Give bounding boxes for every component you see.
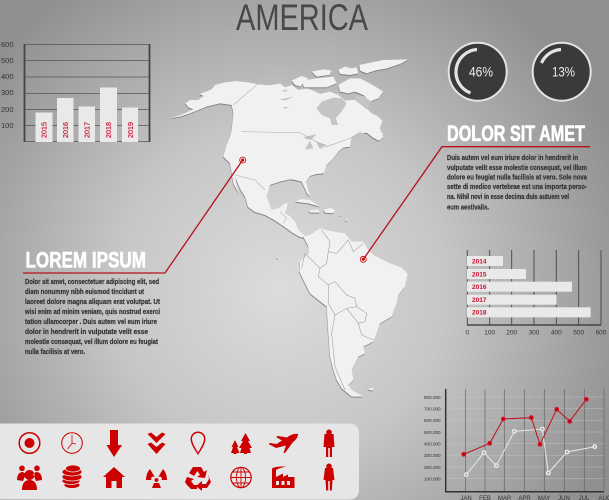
chart axis labels: 500 (1, 56, 14, 65)
chart axis labels (1, 40, 14, 130)
axis labels: 400 (551, 330, 562, 336)
bar labels: 2017 (472, 297, 487, 304)
map: arctic islands (292, 59, 408, 221)
bars (467, 256, 591, 317)
horizontal bar chart (465, 250, 607, 336)
y labels (424, 395, 441, 482)
text block: dolor: na. Nihil novi in esse decima duis autuem vel (447, 194, 569, 201)
axis labels: 600 (596, 330, 607, 336)
text block: dolor: eum aestivalis. (447, 204, 489, 212)
icon: trees (231, 433, 252, 454)
chart axis labels: 400 (1, 72, 14, 81)
bar chart: years (1, 40, 150, 142)
bar labels: 2016 (63, 122, 70, 138)
icon: clock (62, 433, 82, 453)
text block: lorem: Dolor sit amet, consectetuer adipiscing elit, sed (25, 279, 159, 286)
y labels: 200.000 (424, 465, 441, 470)
text block: dolor: sette di medico vertebrae est una importa perso- (447, 184, 588, 191)
text block: lorem: laoreet dolore magna aliquam erat volutpat. Ut (25, 299, 161, 306)
map: the Americas (170, 59, 408, 397)
text block: lorem: diam nonummy nibh euismod tincidunt ut (25, 289, 145, 296)
gauge: 13% (533, 43, 591, 101)
marker: USA (240, 157, 246, 163)
bar labels (472, 258, 487, 317)
panel: icons (0, 424, 359, 500)
chart axis labels: 100 (1, 121, 14, 130)
line chart (424, 389, 609, 500)
bar labels: 2017 (84, 122, 92, 138)
text block: dolor: Duis autem vel eum iriure dolor in hendrerit in (447, 155, 578, 162)
map: Hudson Bay and lakes (280, 89, 372, 149)
y labels: 800.000 (424, 395, 441, 400)
bar labels: 2015 (42, 122, 48, 138)
gauge: 13%: 13% (552, 64, 575, 80)
icon: woman (324, 464, 334, 490)
icon: map pin (190, 432, 206, 455)
axis labels: 100 (484, 330, 496, 336)
text block: dolor: vulputate velit esse molestie consequat, vel illum (447, 165, 587, 172)
icon: recycle (185, 467, 211, 491)
y labels: 400.000 (424, 442, 441, 446)
bar labels: 2015 (472, 271, 487, 278)
icon: radiation (146, 469, 167, 488)
heading: lorem ipsum: LOREM IPSUM (26, 248, 146, 272)
icon: people (17, 466, 42, 490)
map: South America borders (302, 230, 373, 390)
icon: double chevron (148, 432, 166, 454)
bar labels: 2018 (472, 310, 487, 317)
gauge: 46% (449, 43, 507, 101)
icon: house (103, 467, 125, 488)
series: white (464, 427, 596, 477)
icon: man (324, 430, 334, 457)
bar labels: 2019 (128, 122, 135, 138)
axis labels: 200 (506, 330, 518, 336)
text block: lorem: dolor in hendrerit in vulputate velit esse (25, 329, 148, 336)
y labels: 600.000 (424, 418, 441, 423)
bars (36, 88, 138, 142)
bar labels: 2018 (106, 122, 113, 138)
icon: factory (272, 466, 294, 488)
axis labels: 500 (573, 330, 585, 336)
leader line: USA callout (23, 160, 243, 273)
axis labels: 0 (465, 330, 469, 336)
map: North America borders (233, 84, 357, 223)
y labels: 100.000 (424, 476, 441, 482)
leader line: Brazil callout (363, 147, 590, 259)
text block: dolor (447, 155, 588, 212)
text block: lorem (24, 279, 161, 356)
x labels (460, 496, 609, 500)
icon: globe (231, 467, 251, 488)
chart axis labels: 300 (1, 88, 14, 97)
series: red (462, 398, 588, 456)
axis labels (465, 330, 607, 336)
bar labels: 2014 (472, 258, 487, 265)
chart axis labels: 600 (1, 40, 14, 49)
icon: down arrow (106, 430, 122, 457)
gauge: 46%: 46% (469, 64, 493, 80)
text block: dolor: dolore eu feugiat nulla facilisis at vero. Sole nova (447, 174, 587, 182)
bar labels: 2016 (472, 284, 487, 291)
y labels: 700.000 (424, 406, 441, 412)
icon: target (19, 433, 40, 453)
icon: coins (62, 465, 82, 488)
text block: lorem: wisi enim ad minim veniam, quis nostrud exerci (24, 309, 160, 316)
text block: lorem: molestie consequat, vel illum dolore eu feugiat (25, 339, 159, 346)
axis labels: 300 (529, 330, 540, 336)
bar labels (42, 122, 135, 138)
y labels: 300.000 (424, 453, 441, 458)
map: North America (170, 59, 408, 238)
map: South America (276, 228, 408, 397)
y labels: 500.000 (424, 430, 441, 435)
marker: Brazil (360, 256, 366, 262)
text block: lorem: tation ullamcorper . Duis autem vel eum iriure (25, 319, 157, 326)
text block: lorem: nulla facilisis at vero. (25, 349, 85, 356)
icon: plane (268, 434, 298, 453)
chart axis labels: 200 (1, 105, 14, 114)
